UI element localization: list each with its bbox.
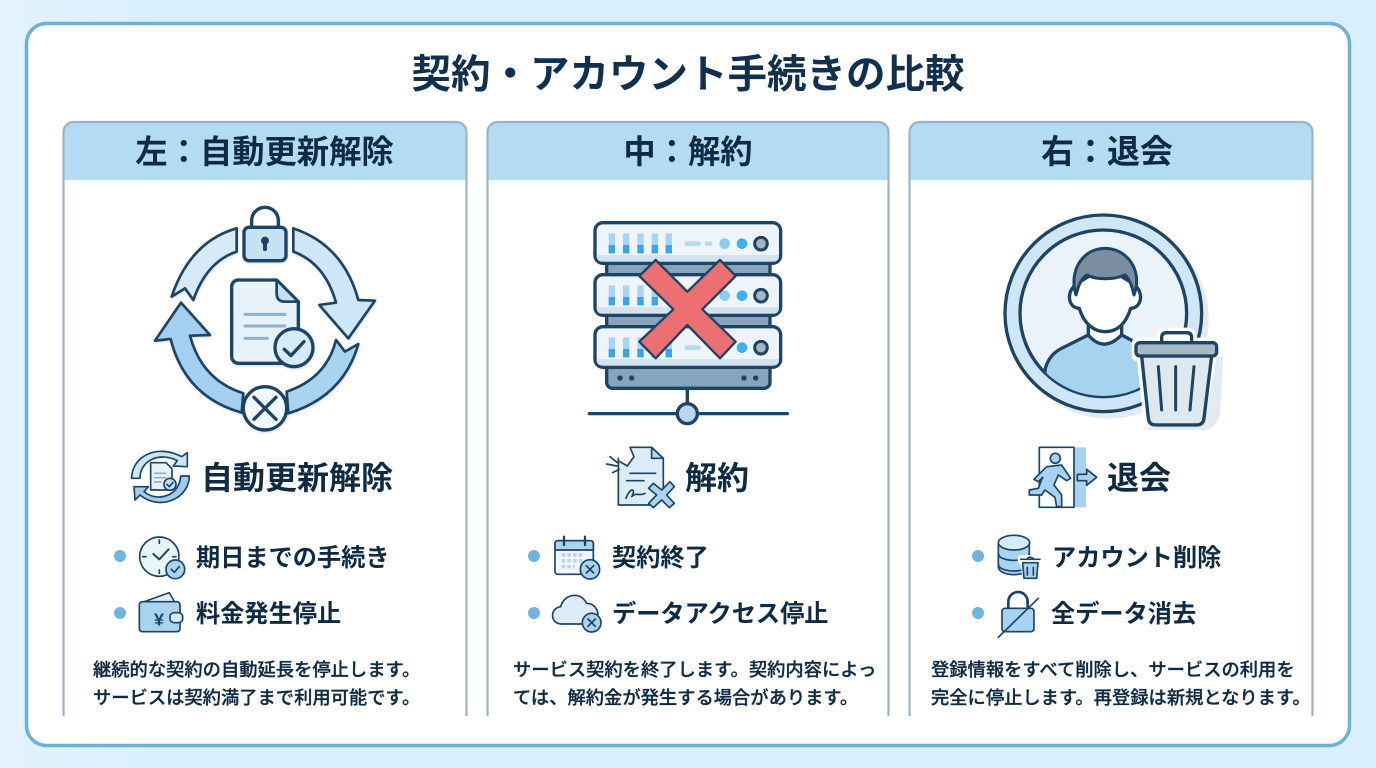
icon: renewal document [132, 451, 189, 502]
subheading: withdrawal [1029, 447, 1171, 507]
subheading: contract cancellation: 解約 [685, 460, 749, 496]
bullet: stop charges: 料金発生停止 [196, 601, 341, 628]
icon: clock with check [140, 537, 185, 579]
icon: torn contract [607, 447, 674, 508]
panel header: left: 左：自動更新解除 [135, 134, 394, 170]
bullet: deadline procedure [114, 537, 390, 579]
description: contract cancellation [513, 659, 876, 708]
icon: calendar with cross [555, 537, 600, 579]
icon: wallet with yen [139, 593, 183, 632]
description: contract cancellation: サービス契約を終了します。契約内容によっ [513, 659, 876, 680]
panel: account withdrawal [910, 122, 1312, 716]
icon: database with trash [998, 535, 1040, 578]
panel: auto-renewal cancellation [64, 122, 466, 716]
icon: crossed-out lock [998, 592, 1038, 637]
title: 契約・アカウント手続きの比較 [412, 53, 964, 97]
bullet: contract end: 契約終了 [612, 545, 709, 572]
icon: person exiting door [1029, 447, 1097, 507]
panel header: middle: 中：解約 [623, 134, 753, 170]
description: auto-renewal cancellation: サービスは契約満了まで利用可能です。 [93, 687, 420, 708]
description: auto-renewal cancellation [93, 659, 420, 708]
bullet: deadline procedure: 期日までの手続き [196, 545, 390, 572]
description: auto-renewal cancellation: 継続的な契約の自動延長を停止します。 [93, 659, 420, 680]
icon: wallet with yen: ¥ [154, 609, 164, 629]
bullet: erase all data: 全データ消去 [1051, 600, 1196, 628]
subheading: contract cancellation [607, 447, 749, 508]
panel: contract cancellation [488, 122, 888, 716]
description: withdrawal: 完全に停止します。再登録は新規となります。 [931, 687, 1311, 708]
icon: cloud with cross [553, 595, 601, 632]
bullet: contract end [528, 537, 709, 579]
description: withdrawal [931, 659, 1311, 708]
bullet: stop charges [114, 593, 341, 632]
description: withdrawal: 登録情報をすべて削除し、サービスの利用を [931, 659, 1295, 680]
bullet: stop data access: データアクセス停止 [612, 600, 828, 628]
subheading: withdrawal: 退会 [1107, 460, 1171, 496]
subheading: auto-renewal cancellation [132, 451, 393, 502]
panel header: left [64, 122, 466, 716]
icon: user profile with trash can [1005, 215, 1223, 430]
bullet: stop data access [528, 595, 828, 632]
bullet: delete account [972, 535, 1221, 578]
icon: renewal cycle with lock and document [155, 207, 375, 430]
bullet: erase all data [972, 592, 1196, 637]
subheading: auto-renewal cancellation: 自動更新解除 [201, 460, 393, 496]
panel header: middle [488, 122, 888, 716]
description: contract cancellation: ては、解約金が発生する場合があります。 [513, 687, 858, 708]
panel header: right: 右：退会 [1041, 133, 1173, 170]
panel header: right [910, 122, 1312, 716]
bullet: delete account: アカウント削除 [1052, 545, 1221, 572]
icon: server rack with red cross [589, 223, 787, 424]
